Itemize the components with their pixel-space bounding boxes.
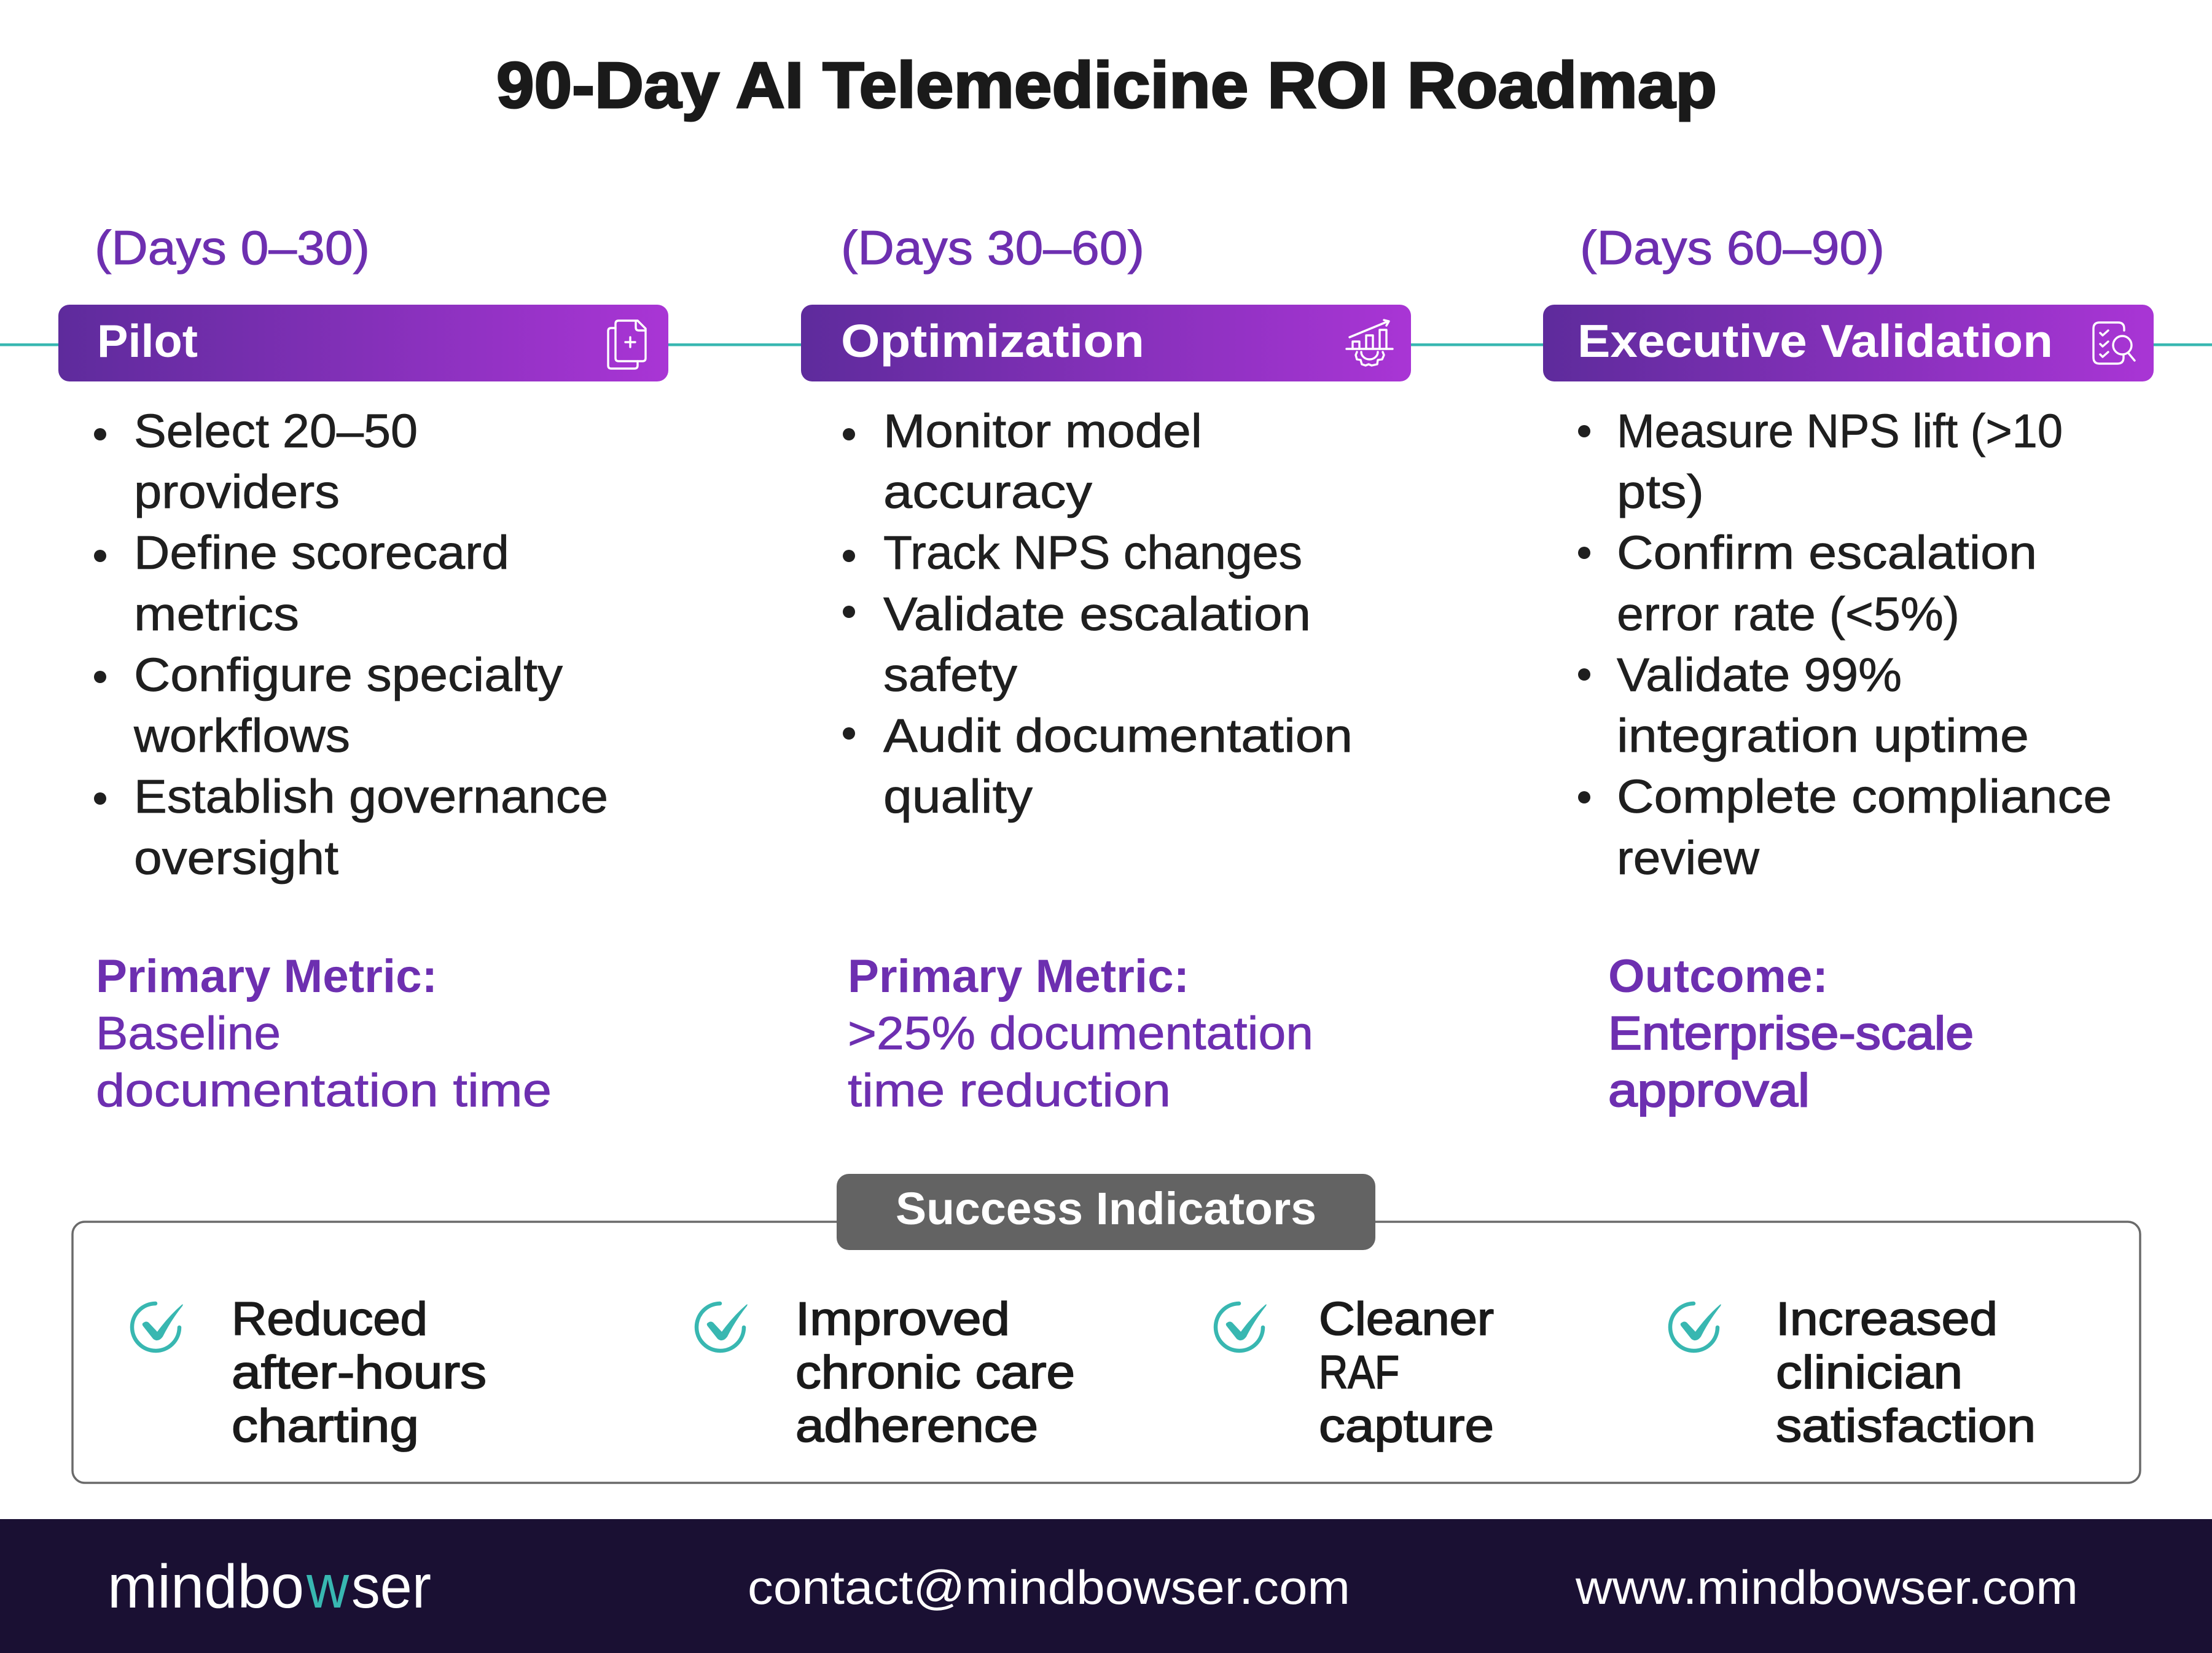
indicator: cleaner RAF capture: capture: [1319, 1400, 1494, 1452]
heading pill: success indicators: Success Indicators: [896, 1183, 1316, 1234]
bullet list: pilot: Define scorecard: [134, 526, 509, 579]
indicator: clinician satisfaction: Increased: [1776, 1293, 1998, 1345]
logo: mindbowser: [107, 1552, 431, 1621]
indicator: cleaner RAF capture: [1216, 1293, 1494, 1452]
bullet list: executive validation: error rate (<5%): [1617, 588, 1960, 641]
bullet list: executive validation: review: [1617, 832, 1759, 885]
icon: checklist with magnifier: [2093, 322, 2135, 364]
bullet list: executive validation: Complete compliance: [1617, 770, 2112, 823]
icon: documents with plus: [608, 321, 646, 369]
outcome: [1608, 950, 1974, 1117]
header bar: pilot: Pilot: [97, 315, 198, 367]
indicator: after-hours charting: charting: [232, 1400, 419, 1452]
panel: optimization: [801, 221, 1411, 1117]
header bar: pilot: [58, 305, 668, 381]
header bar: optimization: [801, 305, 1411, 381]
indicator: chronic care adherence: chronic care: [795, 1346, 1075, 1399]
primary metric: pilot: documentation time: [96, 1065, 552, 1117]
outcome: approval: [1608, 1065, 1810, 1117]
bullet list: pilot: Establish governance: [134, 770, 608, 823]
primary metric: optimization: [848, 950, 1313, 1117]
title: 90-Day AI Telemedicine ROI Roadmap: [496, 49, 1717, 122]
logo: mindbowser: ser: [351, 1552, 431, 1621]
indicator: after-hours charting: after-hours: [232, 1346, 487, 1399]
bullet list: executive validation: [1578, 405, 2112, 885]
indicator: cleaner RAF capture: Cleaner: [1319, 1293, 1494, 1345]
primary metric: pilot: Primary Metric:: [96, 950, 437, 1002]
footer band: [0, 1519, 2212, 1653]
indicator: chronic care adherence: [697, 1293, 1075, 1452]
phase label: days 30-60: (Days 30–60): [841, 221, 1144, 275]
bullet list: pilot: oversight: [134, 832, 338, 885]
bullet list: executive validation: pts): [1617, 466, 1704, 518]
indicator: cleaner RAF capture: RAF: [1319, 1346, 1399, 1399]
primary metric: pilot: Baseline: [96, 1007, 281, 1060]
logo: mindbowser: w: [306, 1552, 350, 1621]
bullet list: optimization: Monitor model: [883, 405, 1202, 458]
indicator: clinician satisfaction: [1670, 1293, 2036, 1452]
primary metric: optimization: time reduction: [848, 1065, 1171, 1117]
outcome: Outcome:: [1608, 950, 1828, 1002]
indicator: clinician satisfaction: satisfaction: [1776, 1400, 2036, 1452]
indicator: after-hours charting: [132, 1293, 487, 1452]
primary metric: pilot: [96, 950, 552, 1117]
primary metric: optimization: >25% documentation: [848, 1007, 1313, 1060]
header bar: executive validation: [1543, 305, 2154, 381]
bullet list: optimization: quality: [883, 770, 1033, 823]
bullet list: pilot: Configure specialty: [134, 649, 563, 701]
bullet list: optimization: Track NPS changes: [883, 526, 1302, 579]
panel: executive validation: [1543, 221, 2154, 1117]
logo: mindbowser: mindbo: [107, 1552, 304, 1621]
phase label: days 0-30: (Days 0–30): [95, 221, 370, 275]
contact email: contact@mindbowser.com: [748, 1560, 1350, 1614]
bullet list: executive validation: Validate 99%: [1617, 649, 1902, 701]
bullet list: pilot: [94, 405, 608, 885]
website: www.mindbowser.com: [1575, 1560, 2078, 1614]
indicator: chronic care adherence: Improved: [795, 1293, 1010, 1345]
bullet list: executive validation: Measure NPS lift (>10: [1617, 405, 2063, 458]
header bar: optimization: Optimization: [841, 315, 1144, 367]
bullet list: optimization: safety: [883, 649, 1018, 701]
bullet list: pilot: metrics: [134, 588, 299, 641]
bullet list: optimization: [843, 405, 1353, 823]
bullet list: optimization: Validate escalation: [883, 588, 1311, 641]
heading pill: success indicators: [837, 1174, 1375, 1250]
indicator: chronic care adherence: adherence: [795, 1400, 1038, 1452]
phase label: days 60-90: (Days 60–90): [1580, 221, 1885, 275]
indicator: after-hours charting: Reduced: [232, 1293, 428, 1345]
bullet list: pilot: Select 20–50: [134, 405, 418, 458]
header bar: executive validation: Executive Validation: [1577, 315, 2053, 367]
bullet list: optimization: Audit documentation: [883, 709, 1353, 762]
timeline connector: [0, 343, 2212, 346]
icon: growth chart with gear: [1346, 320, 1393, 365]
outcome: Enterprise-scale: [1608, 1007, 1974, 1060]
bullet list: executive validation: integration uptime: [1617, 709, 2029, 762]
panel: pilot: [58, 221, 668, 1117]
indicator: clinician satisfaction: clinician: [1776, 1346, 1963, 1399]
bullet list: pilot: workflows: [133, 709, 350, 762]
primary metric: optimization: Primary Metric:: [848, 950, 1189, 1002]
bullet list: executive validation: Confirm escalation: [1617, 526, 2037, 579]
bullet list: pilot: providers: [134, 466, 340, 518]
panel: success indicators: [72, 1174, 2140, 1483]
bullet list: optimization: accuracy: [883, 466, 1093, 518]
